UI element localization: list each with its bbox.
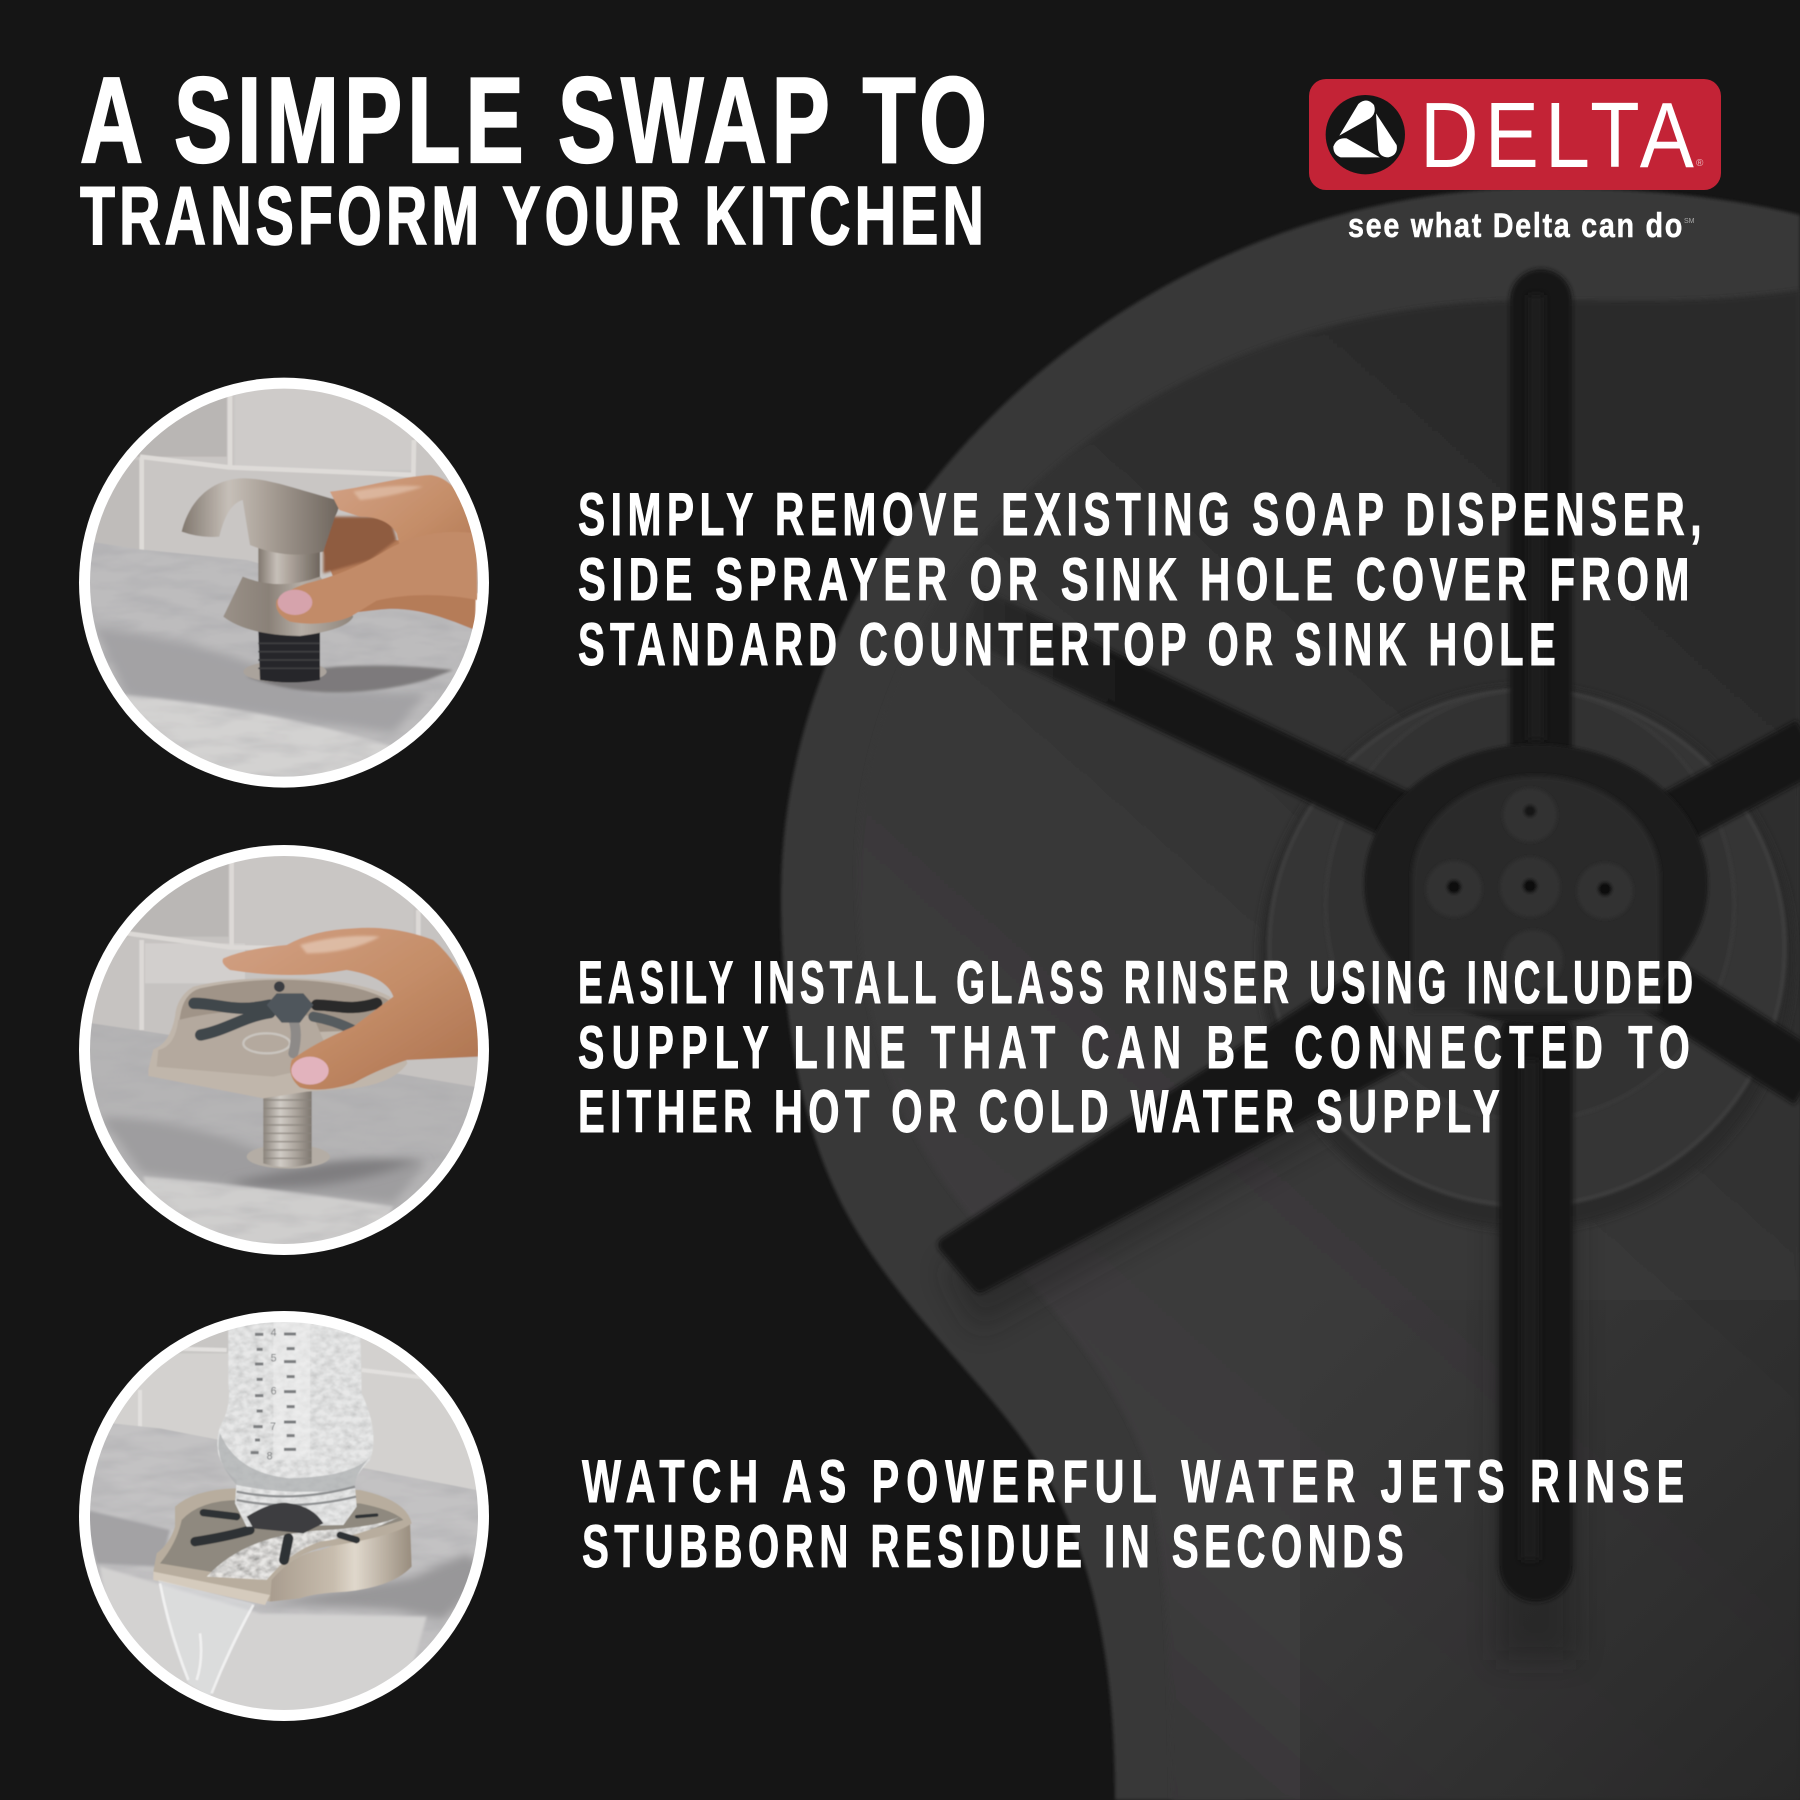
- drain ring around hub: [1259, 686, 1795, 1230]
- service mark: SM: [1684, 218, 1695, 225]
- photo scene: [60, 1300, 510, 1733]
- hand back fingers: [323, 540, 476, 630]
- sink basin floor: [857, 290, 1800, 1800]
- step 1 circle photo: removing soap dispenser: [79, 378, 489, 788]
- hand pressing rinser: [222, 928, 478, 1090]
- rinser basin with water: [160, 1500, 403, 1578]
- red logo badge: [1309, 79, 1721, 190]
- tagline: see what Delta can do: [1348, 207, 1684, 245]
- dark residue under glass: [247, 1503, 323, 1533]
- rinser spokes: [194, 1003, 377, 1053]
- step 1 description: [578, 481, 1707, 678]
- darkened lower right corner: [1300, 1300, 1800, 1800]
- dispenser lower flange: [223, 577, 353, 636]
- glass measurement marks: [251, 1334, 296, 1453]
- glass numerals: 6: [271, 1386, 277, 1398]
- spoke: bottom: [1530, 1040, 1536, 1565]
- glass numerals: 4: [271, 1327, 277, 1339]
- rinser spokes: [195, 1513, 377, 1560]
- glass shading: [219, 1433, 370, 1492]
- Delta logo block: [1309, 79, 1721, 245]
- marble countertop: [90, 1024, 474, 1244]
- spoke shadows: [960, 1030, 1536, 1660]
- spoke: upper left: [970, 612, 1420, 826]
- glass neck rings: [237, 1487, 356, 1505]
- thumbnail: [278, 590, 312, 615]
- white ring: [79, 845, 489, 1255]
- rinser outer side wall: [270, 1520, 412, 1602]
- glass frosted water texture: [217, 1317, 374, 1527]
- background sink photo: glass rinser seen from above: [781, 188, 1800, 1800]
- step 2 description: [578, 949, 1698, 1145]
- icon: Delta triangle mark: [1326, 95, 1405, 174]
- counter hole: [244, 664, 327, 682]
- tiled wall: [94, 388, 478, 594]
- spoke: lower left: [946, 985, 1400, 1285]
- dispenser neck: [258, 548, 320, 584]
- dark shade between fingers: [323, 517, 397, 573]
- upper finger: [330, 474, 472, 543]
- sink outer rim: [781, 188, 1800, 1800]
- rinser plate: [148, 978, 407, 1098]
- foamy water: [207, 1517, 400, 1580]
- step 2 circle photo: installing glass rinser: [79, 845, 489, 1255]
- rinser hub: [267, 993, 313, 1023]
- photo scene: [90, 856, 478, 1244]
- step 3 circle photo: rinsing a glass: [60, 1300, 510, 1733]
- knuckle highlights: [353, 486, 423, 500]
- thumb and palm: [276, 532, 477, 624]
- rinser basin floor: [157, 1011, 333, 1077]
- title line 1: A SIMPLE SWAP TO: [80, 52, 992, 188]
- hub nozzle: [274, 981, 285, 992]
- photo scene: [90, 388, 478, 777]
- water nozzles: [1426, 788, 1633, 990]
- spoke: upper right: [1660, 745, 1800, 826]
- rinser rim: [153, 1488, 412, 1602]
- tiled wall: [92, 856, 478, 1088]
- spoke: lower right: [1660, 985, 1800, 1080]
- hub inner plate: [1412, 776, 1660, 1012]
- step 3 description: [582, 1448, 1691, 1580]
- line 2: STUBBORN RESIDUE IN SECONDS: [582, 1513, 1409, 1580]
- glass centre highlight: [273, 1320, 310, 1460]
- spoke: top: [1536, 295, 1541, 760]
- glass numerals: 7: [270, 1421, 276, 1433]
- glass upper body: [217, 1317, 374, 1527]
- thumbnail: [291, 1057, 329, 1085]
- registered mark: ®: [1696, 158, 1704, 169]
- threaded shank: [263, 1087, 312, 1167]
- marble countertop: [90, 543, 472, 777]
- title line 2: TRANSFORM YOUR KITCHEN: [80, 169, 988, 262]
- counter hole: [247, 1145, 330, 1169]
- glass numerals: 5: [271, 1352, 277, 1364]
- black threaded shank: [258, 632, 320, 682]
- glass numerals: [267, 1327, 277, 1462]
- stream edges: [160, 1583, 253, 1693]
- white ring: [79, 378, 489, 788]
- header title: [80, 52, 992, 262]
- rinser spout lip: [153, 1572, 270, 1605]
- glass numerals: 8: [267, 1450, 273, 1462]
- hand highlights: [300, 936, 380, 953]
- marble countertop: [80, 1420, 493, 1733]
- central hub: [1364, 744, 1708, 1024]
- tiled wall: [60, 1300, 510, 1517]
- rinser basin back wall: [177, 980, 388, 1037]
- white ring: [79, 1311, 489, 1721]
- DELTA wordmark: DELTA: [1420, 83, 1700, 187]
- dispenser head and spout: [182, 478, 339, 555]
- water stream: [158, 1580, 255, 1697]
